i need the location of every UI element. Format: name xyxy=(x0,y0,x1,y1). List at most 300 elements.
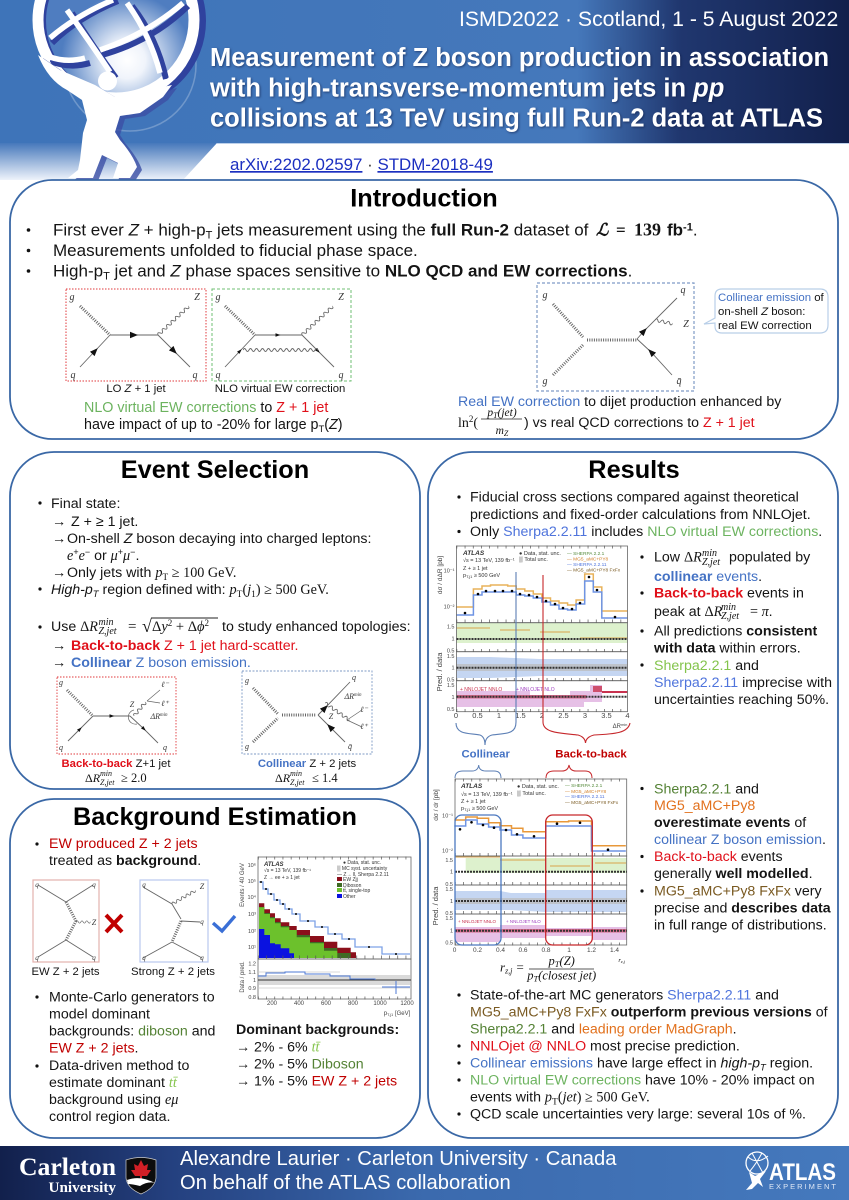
chart: events vs pT with backgrounds: 10² xyxy=(248,929,256,935)
title: Measurement of Z boson production in association xyxy=(210,44,829,72)
upper results commentary xyxy=(640,548,832,708)
diagram: dijet with collinear Z emission: g xyxy=(542,376,548,387)
diagram: NLO virtual EW correction: q xyxy=(216,370,220,381)
equation: rZj: ( xyxy=(560,954,565,968)
diagram: NLO virtual EW correction: Z xyxy=(338,292,344,303)
summary bullets: Collinear emissions have large effect in high-p xyxy=(470,1055,760,1071)
diagram: collinear: g xyxy=(245,676,249,685)
chart: events vs pT with backgrounds: ● Data, stat. unc. xyxy=(343,860,381,866)
diagram: collinear: q xyxy=(352,673,356,682)
intro bullets xyxy=(457,490,822,540)
chart: cross section vs rZj: p xyxy=(461,806,464,812)
selection criteria list: Collinear xyxy=(71,655,132,671)
callout: collinear emission: Collinear emission of xyxy=(718,292,825,304)
diagram: back-to-back: g xyxy=(59,678,63,687)
diagram: collinear: q̄ xyxy=(348,742,352,751)
intro bullets: T xyxy=(206,230,213,242)
selection criteria list: On-shell xyxy=(67,531,124,547)
equation: rZj: p xyxy=(549,954,555,968)
chart: cross section vs rZj: 0.5 xyxy=(445,941,453,947)
chart: cross section vs delta R: p xyxy=(463,573,466,579)
intro bullets: = xyxy=(616,221,626,240)
selection criteria list: − xyxy=(85,547,90,557)
panel: introduction xyxy=(10,180,838,439)
intro bullets: Measurements unfolded to fiducial phase space. xyxy=(53,241,418,260)
chart: cross section vs delta R: √s = 13 TeV, 139 fb⁻¹ xyxy=(463,557,515,564)
chart: cross section vs rZj: 1.2 xyxy=(587,947,596,954)
selection criteria list: → xyxy=(52,514,66,530)
chart: cross section vs delta R: — MG5_aMC+PY8 xyxy=(567,556,609,562)
chart: events vs pT with backgrounds: 1.2 xyxy=(248,962,256,968)
monte-carlo and data-driven bullets: Data-driven method to xyxy=(49,1058,189,1074)
chart: cross section vs delta R: 10⁻² xyxy=(444,605,455,611)
lower results commentary: collinear Z boson emission. xyxy=(654,832,826,848)
chart: cross section vs delta R: — SHERPA 2.2.11 xyxy=(567,562,607,568)
chart: cross section vs rZj: 0 xyxy=(453,947,457,954)
diagram: EW Z + 2 jets: q xyxy=(92,881,96,889)
upper results commentary: min xyxy=(721,602,736,613)
intro bullets: Fiducial cross sections compared against theoretical xyxy=(470,490,799,506)
paper links: arXiv:2202.02597 · STDM-2018-49 xyxy=(230,155,493,174)
chart: cross section vs delta R: ≥ 500 GeV xyxy=(472,573,500,579)
dominant backgrounds list: EW Z + 2 jets xyxy=(312,1074,397,1090)
NLO EW corrections note: NLO virtual EW corrections to Z + 1 jet xyxy=(84,400,328,416)
topology captions: ΔR xyxy=(275,771,291,785)
bracket: collinear xyxy=(456,572,516,745)
chart: cross section vs rZj: 0.6 xyxy=(518,947,528,954)
selection criteria list: ≥ 100 GeV. xyxy=(168,565,236,581)
chart: cross section vs rZj: — SHERPA 2.2.1 xyxy=(565,783,603,789)
chart: cross section vs delta R: — MG5_aMC+PY8 FxFx xyxy=(567,568,621,574)
real EW correction note: ( xyxy=(473,416,478,431)
selection criteria list: → xyxy=(52,638,66,654)
chart: cross section vs rZj: 0.5 xyxy=(445,882,453,888)
intro bullets: High-p xyxy=(53,262,103,281)
title: collisions at 13 TeV using full Run-2 data at ATLAS xyxy=(210,104,823,132)
upper results commentary: populated by xyxy=(729,550,811,566)
collaboration line: On behalf of the ATLAS collaboration xyxy=(180,1172,511,1194)
diagram: collinear: Z xyxy=(329,712,334,721)
selection criteria list: Only jets with xyxy=(67,565,155,581)
chart: events vs pT with backgrounds: 0.8 xyxy=(248,995,256,1001)
real EW correction note: m xyxy=(496,425,504,437)
chart: cross section vs rZj: 1.5 xyxy=(445,887,453,893)
lower results commentary: precise and describes data xyxy=(654,901,831,917)
summary bullets: T xyxy=(760,1062,767,1073)
summary bullets: jet) ≥ 500 GeV. xyxy=(563,1089,650,1105)
selection criteria list: + xyxy=(73,547,79,557)
chart: cross section vs delta R: min xyxy=(621,722,627,727)
chart: events vs pT with backgrounds: p xyxy=(384,1011,387,1017)
real EW correction note: p xyxy=(487,407,493,419)
chart: cross section vs rZj: — MG5_aMC+PY8 xyxy=(565,789,607,795)
monte-carlo and data-driven bullets: backgrounds: diboson and xyxy=(49,1024,215,1040)
monte-carlo and data-driven bullets xyxy=(35,990,215,1125)
chart: cross section vs rZj: — SHERPA 2.2.11 xyxy=(565,794,605,800)
diagram: back-to-back: q xyxy=(163,743,167,752)
chart: cross section vs delta R: 3 xyxy=(583,711,587,720)
lower results commentary: MG5_aMC+Py8 xyxy=(654,798,755,814)
NLO EW corrections note: T xyxy=(318,424,324,435)
diagram: dijet with collinear Z emission: Z xyxy=(683,319,689,330)
summary bullets: NLO virtual EW corrections have 10% - 20% impact on xyxy=(470,1072,815,1088)
diagram: collinear: min xyxy=(354,693,362,698)
selection criteria list: e xyxy=(79,548,85,564)
chart: events vs pT with backgrounds: EW Zjj xyxy=(343,877,358,883)
topology captions: ≥ 2.0 xyxy=(121,771,147,785)
chart: cross section vs delta R: 2 xyxy=(540,711,544,720)
selection criteria list xyxy=(38,496,411,671)
topology captions: min xyxy=(100,769,112,778)
selection criteria list: T xyxy=(93,589,100,600)
selection criteria list: ϕ xyxy=(197,619,205,635)
upper results commentary: All predictions consistent xyxy=(654,624,817,640)
chart: events vs pT with backgrounds: tt̄, single-top xyxy=(343,887,370,894)
chart: cross section vs delta R: 0.5 xyxy=(447,648,454,654)
summary bullets: MG5_aMC+Py8 FxFx outperform previous versions of xyxy=(470,1004,828,1020)
chart: events vs pT with backgrounds: Data / pred. xyxy=(240,961,246,993)
selection criteria list: ) ≥ 500 GeV. xyxy=(256,582,329,598)
equation: rZj xyxy=(500,954,626,984)
chart: cross section vs delta R: Z + ≥ 1 jet xyxy=(463,566,488,572)
EW Z+2 jets bullet: treated as background. xyxy=(49,853,201,869)
footer banner xyxy=(0,1146,849,1200)
chart: cross section vs delta R: 0.5 xyxy=(447,678,454,684)
selection criteria list: Z + 1 jet hard-scatter. xyxy=(160,638,298,654)
upper results commentary: uncertainties reaching 50%. xyxy=(654,692,829,708)
diagram: back-to-back: Z xyxy=(130,700,135,709)
chart: cross section vs delta R: 1 xyxy=(451,637,454,643)
icon: Carleton shield xyxy=(126,1158,156,1194)
equation: rZj: = xyxy=(512,960,524,975)
chart: cross section vs rZj: ATLAS xyxy=(460,783,483,790)
icon: red cross xyxy=(106,915,122,932)
chart: events vs pT with backgrounds: T,j1 xyxy=(387,1012,394,1017)
chart: cross section vs rZj: + NNLOJET NNLO xyxy=(458,919,497,924)
dominant backgrounds list: Diboson xyxy=(312,1057,364,1073)
upper results commentary: Z,jet xyxy=(702,557,720,568)
topology captions xyxy=(62,758,356,787)
diagram: EW Z + 2 jets: q xyxy=(35,954,39,962)
summary bullets: events with p xyxy=(470,1089,552,1105)
diagram: EW Z + 2 jets: q xyxy=(35,881,39,889)
diagram: dijet with collinear Z emission: q̄ xyxy=(676,376,682,387)
chart: events vs pT with backgrounds: Other xyxy=(343,894,356,900)
chart: cross section vs rZj: 0.8 xyxy=(541,947,551,954)
chart: events vs pT with backgrounds: — Z→ ll, Sherpa 2.2.11 xyxy=(337,872,389,878)
highlight: collinear region xyxy=(455,815,501,945)
brace: lower collinear xyxy=(455,765,501,778)
chart: events vs pT with backgrounds: 400 xyxy=(294,1001,305,1007)
chart: cross section vs delta R: ATLAS xyxy=(462,550,485,557)
intro bullets: Z phase spaces sensitive to NLO QCD and EW corrections. xyxy=(170,262,632,281)
label: back-to-back: Back-to-back xyxy=(555,749,627,761)
selection criteria list: High-p xyxy=(51,582,93,598)
chart: cross section vs rZj: 0.2 xyxy=(473,947,482,954)
chart: events vs pT with backgrounds: 0.9 xyxy=(248,986,256,992)
heading: introduction: Introduction xyxy=(350,184,498,212)
chart: events vs pT with backgrounds: 10³ xyxy=(248,912,256,918)
lower results commentary: overestimate events of xyxy=(654,815,806,831)
intro bullets: ℒ xyxy=(596,221,609,240)
chart: cross section vs rZj: 10⁻¹ xyxy=(442,814,453,820)
dominant backgrounds list: 2% - 5% xyxy=(254,1057,312,1073)
intro bullets: fb xyxy=(667,221,683,240)
intro bullets: T xyxy=(103,271,110,283)
equation: rZj: z,j xyxy=(620,959,626,965)
icon: ATLAS experiment logo: ATLAS xyxy=(769,1159,836,1186)
dominant backgrounds list: tt̄ xyxy=(312,1040,321,1056)
selection criteria list: Z boson decaying into charged leptons: xyxy=(124,531,371,547)
chart: events vs pT with backgrounds: 800 xyxy=(348,1001,359,1007)
presenter line: Alexandre Laurier · Carleton University · Canada xyxy=(180,1148,617,1170)
chart: cross section vs rZj: T,j1 xyxy=(464,807,471,812)
summary bullets: State-of-the-art MC generators Sherpa2.2.11 and xyxy=(470,987,779,1003)
icon: blue check xyxy=(213,916,235,931)
diagram captions: Strong Z + 2 jets xyxy=(131,966,215,978)
summary bullets: ( xyxy=(558,1089,563,1105)
selection criteria list: p xyxy=(229,582,237,598)
selection criteria list: + xyxy=(118,547,123,557)
icon: ATLAS figure holding globe xyxy=(38,0,200,181)
selection criteria list: Back-to-back xyxy=(71,638,160,654)
diagram: collinear xyxy=(242,670,372,754)
chart: cross section vs delta R: 1.5 xyxy=(447,654,454,660)
chart: cross section vs delta R: 1 xyxy=(497,711,501,720)
diagram: EW Z + 2 jets xyxy=(32,879,100,963)
diagram: strong Z + 2 jets: q xyxy=(200,954,204,962)
summary bullets xyxy=(457,987,828,1122)
chart: cross section vs rZj: 1 xyxy=(450,870,453,876)
chart: cross section vs rZj: √s = 13 TeV, 139 fb⁻¹ xyxy=(461,791,513,798)
monte-carlo and data-driven bullets: Monte-Carlo generators to xyxy=(49,990,215,1006)
diagram: NLO virtual EW correction: g xyxy=(216,292,220,303)
diagram captions xyxy=(31,966,215,978)
selection criteria list: T xyxy=(237,590,243,600)
monte-carlo and data-driven bullets: control region data. xyxy=(49,1109,170,1125)
chart: cross section vs rZj: Pred. / data xyxy=(431,886,440,925)
selection criteria list: p xyxy=(154,565,162,581)
chart: cross section vs delta R: 1 xyxy=(451,695,454,701)
diagram: NLO virtual EW correction xyxy=(212,288,352,382)
NLO EW corrections note xyxy=(84,400,343,435)
chart: cross section vs delta R: ΔR xyxy=(613,724,621,730)
intro bullets: First ever Z + high-p xyxy=(53,221,206,240)
monte-carlo and data-driven bullets: EW Z + 2 jets. xyxy=(49,1041,138,1057)
upper results commentary: = π. xyxy=(750,604,773,620)
selection criteria list: 1 xyxy=(251,590,256,600)
chart: cross section vs rZj: 1 xyxy=(450,899,453,905)
panel: results xyxy=(428,452,838,1138)
chart: cross section vs delta R: 1.5 xyxy=(447,625,454,631)
chart: events vs pT with backgrounds: 1 xyxy=(253,978,256,984)
diagram: collinear: ℓ⁺ xyxy=(360,722,369,731)
lower results commentary: MG5_aMC+Py8 FxFx very xyxy=(654,884,822,900)
selection criteria list: region defined with: xyxy=(99,582,230,598)
intro bullets: 139 xyxy=(634,220,661,240)
diagram: LO Z + 1 jet: Z xyxy=(194,292,200,303)
real EW correction note xyxy=(458,394,782,438)
upper results commentary: with data within errors. xyxy=(653,641,801,657)
chart: events vs pT with backgrounds xyxy=(240,857,414,1017)
chart: cross section vs rZj: dσ / dr [pb] xyxy=(433,789,440,821)
selection criteria list: or xyxy=(90,548,111,564)
lower results commentary: Sherpa2.2.1 and xyxy=(654,781,759,797)
summary bullets: Sherpa2.2.1 and leading order MadGraph. xyxy=(470,1021,737,1037)
diagram: dijet with collinear Z emission xyxy=(536,282,695,392)
selection criteria list: = xyxy=(128,619,136,635)
selection criteria list: + Δ xyxy=(172,619,197,635)
chart: events vs pT with backgrounds: √s = 13 TeV, 139 fb⁻¹ xyxy=(264,867,311,874)
chart: cross section vs rZj: 1.5 xyxy=(445,916,453,922)
upper results commentary: min xyxy=(702,548,717,559)
diagram: LO Z + 1 jet: g xyxy=(70,292,74,303)
EW Z+2 jets bullet: EW produced Z + 2 jets xyxy=(49,836,198,852)
Carleton University wordmark xyxy=(19,1152,116,1196)
diagram: strong Z + 2 jets: q xyxy=(142,954,146,962)
highlight: back-to-back region xyxy=(546,815,592,945)
chart: cross section vs rZj: — MG5_aMC+PY8 FxFx xyxy=(565,800,619,806)
chart: events vs pT with backgrounds: Diboson xyxy=(343,883,362,889)
summary bullets: region. xyxy=(766,1055,813,1071)
title xyxy=(209,44,829,132)
Carleton University wordmark: Carleton xyxy=(19,1152,116,1181)
chart: cross section vs rZj: 0.4 xyxy=(496,947,505,954)
chart: events vs pT with backgrounds: ATLAS xyxy=(263,862,284,868)
chart: cross section vs delta R: 10⁻¹ xyxy=(444,569,455,575)
selection criteria list: μ xyxy=(122,548,130,564)
label: collinear: Collinear xyxy=(462,749,510,761)
chart: cross section vs rZj: ≥ 500 GeV xyxy=(470,806,498,812)
chart: cross section vs delta R: 2.5 xyxy=(558,711,569,720)
equation: rZj: p xyxy=(527,968,533,982)
NLO EW corrections note: Z) xyxy=(329,417,343,433)
diagram: collinear: ΔR xyxy=(344,692,354,701)
monte-carlo and data-driven bullets: background using eμ xyxy=(49,1092,178,1108)
selection criteria list: Δy xyxy=(152,619,168,635)
equation: rZj: z,j xyxy=(504,967,513,976)
chart: cross section vs rZj: + NNLOJET NLO xyxy=(506,919,541,924)
NLO EW corrections note: ( xyxy=(324,417,329,433)
equation: rZj: r xyxy=(500,960,505,975)
diagram: back-to-back xyxy=(56,676,176,754)
dominant backgrounds list: → xyxy=(236,1057,250,1073)
selection criteria list: min xyxy=(98,617,114,628)
upper results commentary: Sherpa2.2.11 imprecise with xyxy=(654,675,832,691)
upper results commentary: Z,jet xyxy=(721,611,739,622)
diagram: EW Z + 2 jets: Z xyxy=(92,918,97,927)
chart: events vs pT with backgrounds: 1000 xyxy=(373,1001,387,1007)
equation: rZj: ( xyxy=(538,968,543,982)
equation: rZj: r xyxy=(618,957,621,964)
chart: cross section vs rZj xyxy=(431,779,627,954)
upper results commentary: peak at ΔR xyxy=(654,604,723,620)
real EW correction note: Z xyxy=(504,429,509,438)
chart: cross section vs delta R: ● Data, stat. unc. xyxy=(519,551,561,557)
chart: events vs pT with backgrounds: [GeV] xyxy=(393,1011,411,1017)
diagram captions: LO Z + 1 jet xyxy=(106,383,167,395)
callout: collinear emission xyxy=(704,289,828,333)
chart: events vs pT with backgrounds: 10⁶ xyxy=(248,862,256,869)
dominant backgrounds list: → xyxy=(236,1040,250,1056)
monte-carlo and data-driven bullets: estimate dominant tt̄ xyxy=(49,1075,178,1091)
real EW correction note: ) vs real QCD corrections to Z + 1 jet xyxy=(524,415,755,431)
topology captions: Z,jet xyxy=(100,778,115,787)
intro bullets: Only Sherpa2.2.11 includes NLO virtual EW corrections. xyxy=(470,524,822,540)
chart: events vs pT with backgrounds: 1.1 xyxy=(248,970,256,976)
diagram: collinear: g xyxy=(245,742,249,751)
equation: rZj: Z) xyxy=(564,954,575,968)
icon: ATLAS experiment logo xyxy=(746,1152,836,1191)
chart: cross section vs delta R: 1.5 xyxy=(447,683,454,689)
chart: cross section vs delta R xyxy=(435,546,630,730)
chart: events vs pT with backgrounds: Z → ee + ≥ 1 jet xyxy=(264,875,300,881)
chart: events vs pT with backgrounds: 10⁵ xyxy=(248,878,256,885)
selection criteria list: to study enhanced topologies: xyxy=(222,619,411,635)
NLO EW corrections note: have impact of up to -20% for large p xyxy=(84,417,318,433)
diagram captions xyxy=(106,383,345,395)
equation: rZj: T xyxy=(533,974,539,984)
real EW correction note: Real EW correction to dijet production enhanced by xyxy=(458,394,782,410)
upper results commentary: collinear events. xyxy=(654,569,762,585)
chart: cross section vs delta R: 0.5 xyxy=(472,711,483,720)
chart: events vs pT with backgrounds: 600 xyxy=(321,1001,332,1007)
chart: events vs pT with backgrounds: 10¹ xyxy=(248,945,256,951)
diagram: back-to-back: q xyxy=(59,743,63,752)
chart: cross section vs delta R: + NNLOJET NLO xyxy=(516,687,555,693)
chart: cross section vs delta R: — SHERPA 2.2.1 xyxy=(567,551,605,557)
panel: background estimation xyxy=(10,799,420,1138)
real EW correction note: 2 xyxy=(469,414,473,424)
conference line: ISMD2022 · Scotland, 1 - 5 August 2022 xyxy=(459,8,838,31)
chart: cross section vs delta R: 3.5 xyxy=(601,711,612,720)
selection criteria list: Final state: xyxy=(51,496,120,512)
selection criteria list: T xyxy=(162,573,168,583)
dominant backgrounds list: → xyxy=(236,1074,250,1090)
chart: events vs pT with backgrounds: 10⁴ xyxy=(248,894,257,901)
selection criteria list: → xyxy=(52,531,66,547)
topology captions: Back-to-back Z+1 jet xyxy=(62,758,171,770)
chart: cross section vs rZj: ▒ Total unc. xyxy=(517,790,546,797)
chart: cross section vs rZj: Z + ≥ 1 jet xyxy=(461,799,486,805)
diagram: collinear: ℓ⁻ xyxy=(360,705,369,714)
heading: results: Results xyxy=(588,456,680,484)
topology captions: ≤ 1.4 xyxy=(312,771,338,785)
equation: rZj: closest jet) xyxy=(542,968,596,982)
title: with high-transverse-momentum jets in pp xyxy=(209,74,724,102)
heading: background estimation: Background Estimation xyxy=(73,803,357,831)
upper results commentary: Back-to-back events in xyxy=(654,586,804,602)
diagram: LO Z + 1 jet: q xyxy=(70,370,76,381)
chart: cross section vs rZj: 1.4 xyxy=(610,947,619,954)
intro bullets: jet and xyxy=(110,262,170,281)
upper results commentary: Low ΔR xyxy=(654,550,702,566)
diagram: back-to-back: ℓ⁺ xyxy=(161,699,170,708)
selection criteria list: Z boson emission. xyxy=(132,655,251,671)
EW Z+2 jets bullet xyxy=(35,836,201,869)
lower results commentary xyxy=(640,781,831,934)
diagram: dijet with collinear Z emission: g xyxy=(542,290,548,301)
panel: event selection xyxy=(10,452,420,789)
intro bullets: jets measurement using the xyxy=(212,221,431,240)
chart: cross section vs rZj: 1 xyxy=(567,947,571,954)
lower results commentary: Back-to-back events xyxy=(654,849,783,865)
chart: events vs pT with backgrounds: 200 xyxy=(267,1001,278,1007)
callout: collinear emission: on-shell Z boson: xyxy=(718,306,805,318)
intro bullets: predictions and fixed-order calculations from NNLOjet. xyxy=(470,507,811,523)
diagram: NLO virtual EW correction: q xyxy=(338,370,344,381)
chart: cross section vs delta R: dσ / dΔR [pb] xyxy=(437,556,444,594)
